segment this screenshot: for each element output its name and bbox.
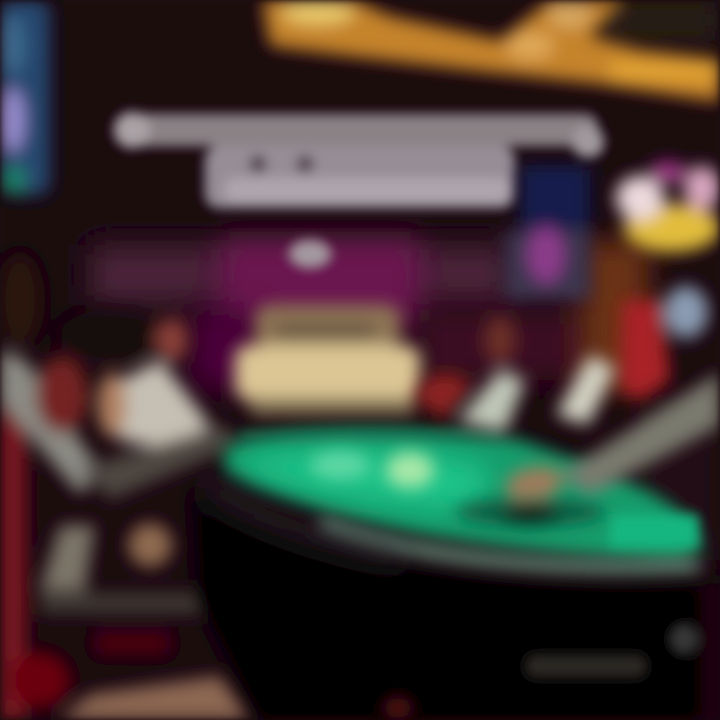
pink and gold lamp right (616, 162, 720, 400)
table dark base (195, 490, 700, 720)
left seated figures (0, 255, 250, 720)
central cream cake stand (235, 305, 420, 416)
title block (114, 112, 604, 208)
neon panel top left (0, 0, 50, 195)
right seated figures (415, 316, 720, 520)
green table felt (205, 430, 700, 567)
caption and logo bottom right (525, 590, 720, 720)
purple sign right of title (505, 165, 590, 300)
gold ceiling fixture (262, 0, 720, 102)
red spot bottom (384, 698, 412, 718)
small centre emblem (289, 240, 331, 268)
